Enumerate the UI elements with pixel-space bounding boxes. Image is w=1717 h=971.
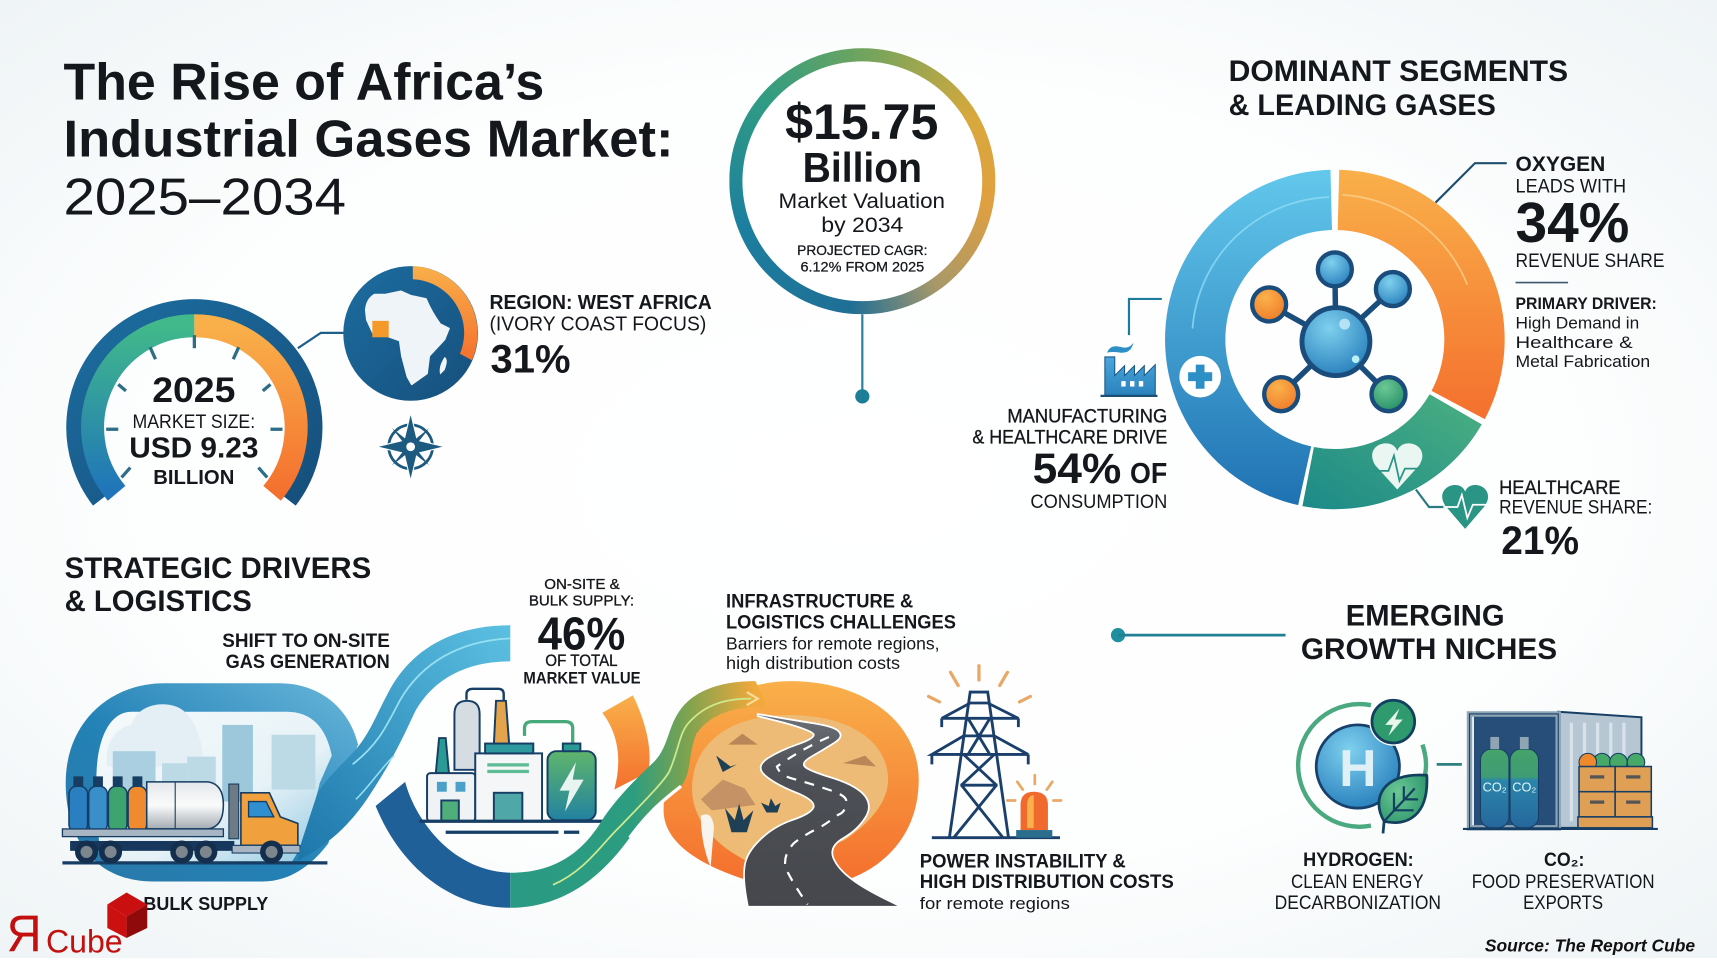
callout: oxygen share: LEADS WITH [1516,176,1626,198]
logo: RCube [7,892,147,963]
heading: emerging growth niches: EMERGING [1346,599,1505,632]
callout: oxygen share: Healthcare & [1516,333,1633,352]
callout: 2034 market valuation ring: Billion [803,144,922,191]
callout: oxygen share: OXYGEN [1516,153,1605,176]
text block: West Africa share [489,292,712,381]
callout: healthcare revenue share: HEALTHCARE [1499,478,1621,499]
heading: strategic drivers: & LOGISTICS [65,585,252,618]
icon: factory with leader line [1101,299,1162,396]
callout: 2034 market valuation ring: by 2034 [821,213,904,237]
text: infrastructure challenges: Barriers for remote regions, [726,633,940,653]
icon: molecule [1252,252,1410,411]
icon: power pylon with beacon [929,666,1061,838]
callout: oxygen share: REVENUE SHARE [1516,250,1664,272]
text: CO2 label: FOOD PRESERVATION [1472,872,1655,893]
gauge: 2025 market size: USD 9.23 [129,433,258,465]
callout: oxygen share [1436,153,1664,371]
text: infrastructure challenges: LOGISTICS CHALLENGES [726,612,956,634]
callout: healthcare revenue share: 21% [1501,519,1579,563]
icon: hydrogen [1298,698,1427,833]
callout: manufacturing and healthcare: OF [1130,458,1167,490]
text: 46% on-site share: MARKET VALUE [523,668,641,687]
heading: strategic drivers [65,552,371,618]
ribbon: green to orange link with arrow [510,681,767,908]
text: hydrogen label: DECARBONIZATION [1275,893,1441,914]
heading: dominant segments [1229,55,1568,122]
text block: West Africa share: (IVORY COAST FOCUS) [489,314,706,336]
icon: Africa globe [343,266,478,401]
callout: manufacturing and healthcare: & HEALTHCARE DRIVE [972,427,1167,448]
callout: 2034 market valuation ring: Market Valuation [779,189,945,213]
icon: on-site plant [419,689,608,832]
callout: 2034 market valuation ring: 6.12% FROM 2025 [800,260,924,276]
text: hydrogen label: CLEAN ENERGY [1291,872,1424,893]
callout: healthcare revenue share [1416,478,1652,563]
gauge: 2025 market size: 2025 [152,371,235,410]
callout: oxygen share: 34% [1516,191,1629,255]
gauge: 2025 market size: BILLION [153,467,234,489]
icon: CO2 container: CO₂ [1483,781,1507,795]
ribbon: bulk supply loop [62,683,358,882]
callout: manufacturing and healthcare: 54% [1033,445,1121,493]
ribbon: lower arc [376,782,510,908]
callout: 2034 market valuation ring: PROJECTED CAGR: [797,243,927,259]
text: shift to on-site: GAS GENERATION [226,651,390,673]
text: power instability: POWER INSTABILITY & [920,850,1126,872]
heading: strategic drivers: STRATEGIC DRIVERS [65,552,371,585]
text: infrastructure challenges: INFRASTRUCTURE & [726,591,913,613]
logo: RCube: Я [7,905,42,963]
title: Industrial Gases Market: [64,110,673,168]
heading: dominant segments: & LEADING GASES [1229,89,1496,122]
text: shift to on-site [222,630,390,673]
callout: 2034 market valuation ring: $15.75 [785,93,938,150]
text: infrastructure challenges: high distribution costs [726,653,900,673]
connector: hydrogen to container [1437,763,1462,766]
icon: CO2 container: CO₂ [1512,781,1536,795]
segment: healthcare [1302,394,1482,509]
text: hydrogen label [1275,850,1441,914]
heading: emerging growth niches [1111,599,1557,666]
text: shift to on-site: SHIFT TO ON-SITE [222,630,390,652]
callout: oxygen share: PRIMARY DRIVER: [1516,295,1657,313]
text: bulk supply label: BULK SUPPLY [143,893,269,914]
title: 2025–2034 [64,168,346,226]
text: 46% on-site share: BULK SUPPLY: [529,594,634,610]
icon: hydrogen: H [1339,739,1376,797]
donut chart: gas segments [1165,170,1505,509]
text: hydrogen label: HYDROGEN: [1303,850,1414,871]
ribbon: infrastructure loop with road [664,681,919,907]
heading: emerging growth niches: GROWTH NICHES [1301,633,1557,666]
text block: West Africa share: 31% [491,337,571,381]
text: CO2 label: CO₂: [1544,850,1585,871]
text: power instability: HIGH DISTRIBUTION COSTS [920,871,1174,893]
icon: CO2 container [1463,712,1658,829]
callout: oxygen share: Metal Fabrication [1516,352,1650,371]
title: The Rise of Africa’s [64,53,544,111]
connector: gauge to globe [298,333,346,348]
text: 46% on-site share: OF TOTAL [545,651,618,670]
gauge: 2025 market size [74,307,315,501]
callout: healthcare revenue share: REVENUE SHARE: [1499,498,1652,519]
text: power instability: for remote regions [920,894,1070,913]
text: 46% on-site share [523,577,641,687]
logo: RCube: Cube [46,923,123,960]
segment: manufacturing [1165,170,1332,505]
callout: manufacturing and healthcare: MANUFACTURING [1007,407,1167,428]
title [64,53,673,226]
text: 46% on-site share: 46% [538,607,625,659]
text block: West Africa share: REGION: WEST AFRICA [489,292,712,314]
ribbon: small orange segment [602,695,650,790]
icon: truck [62,776,327,863]
text: CO2 label [1472,850,1655,914]
callout: oxygen share: High Demand in [1516,314,1639,333]
text: CO2 label: EXPORTS [1523,893,1603,914]
text: 46% on-site share: ON-SITE & [544,577,620,593]
callout: manufacturing and healthcare [972,407,1167,513]
text: power instability [920,850,1174,913]
gauge: 2025 market size: MARKET SIZE: [132,411,255,433]
icon: heart on donut [1369,443,1422,489]
icon: plus badge [1179,356,1221,397]
segment: oxygen [1338,170,1505,419]
icon: road [744,714,901,907]
callout: 2034 market valuation ring [729,48,995,404]
text: infrastructure challenges [726,591,956,673]
heading: dominant segments: DOMINANT SEGMENTS [1229,55,1568,88]
callout: manufacturing and healthcare: CONSUMPTION [1030,492,1167,513]
ribbon: S-curve to on-site [298,625,510,861]
source note: Source: The Report Cube [1485,936,1695,956]
icon: compass [377,413,445,481]
